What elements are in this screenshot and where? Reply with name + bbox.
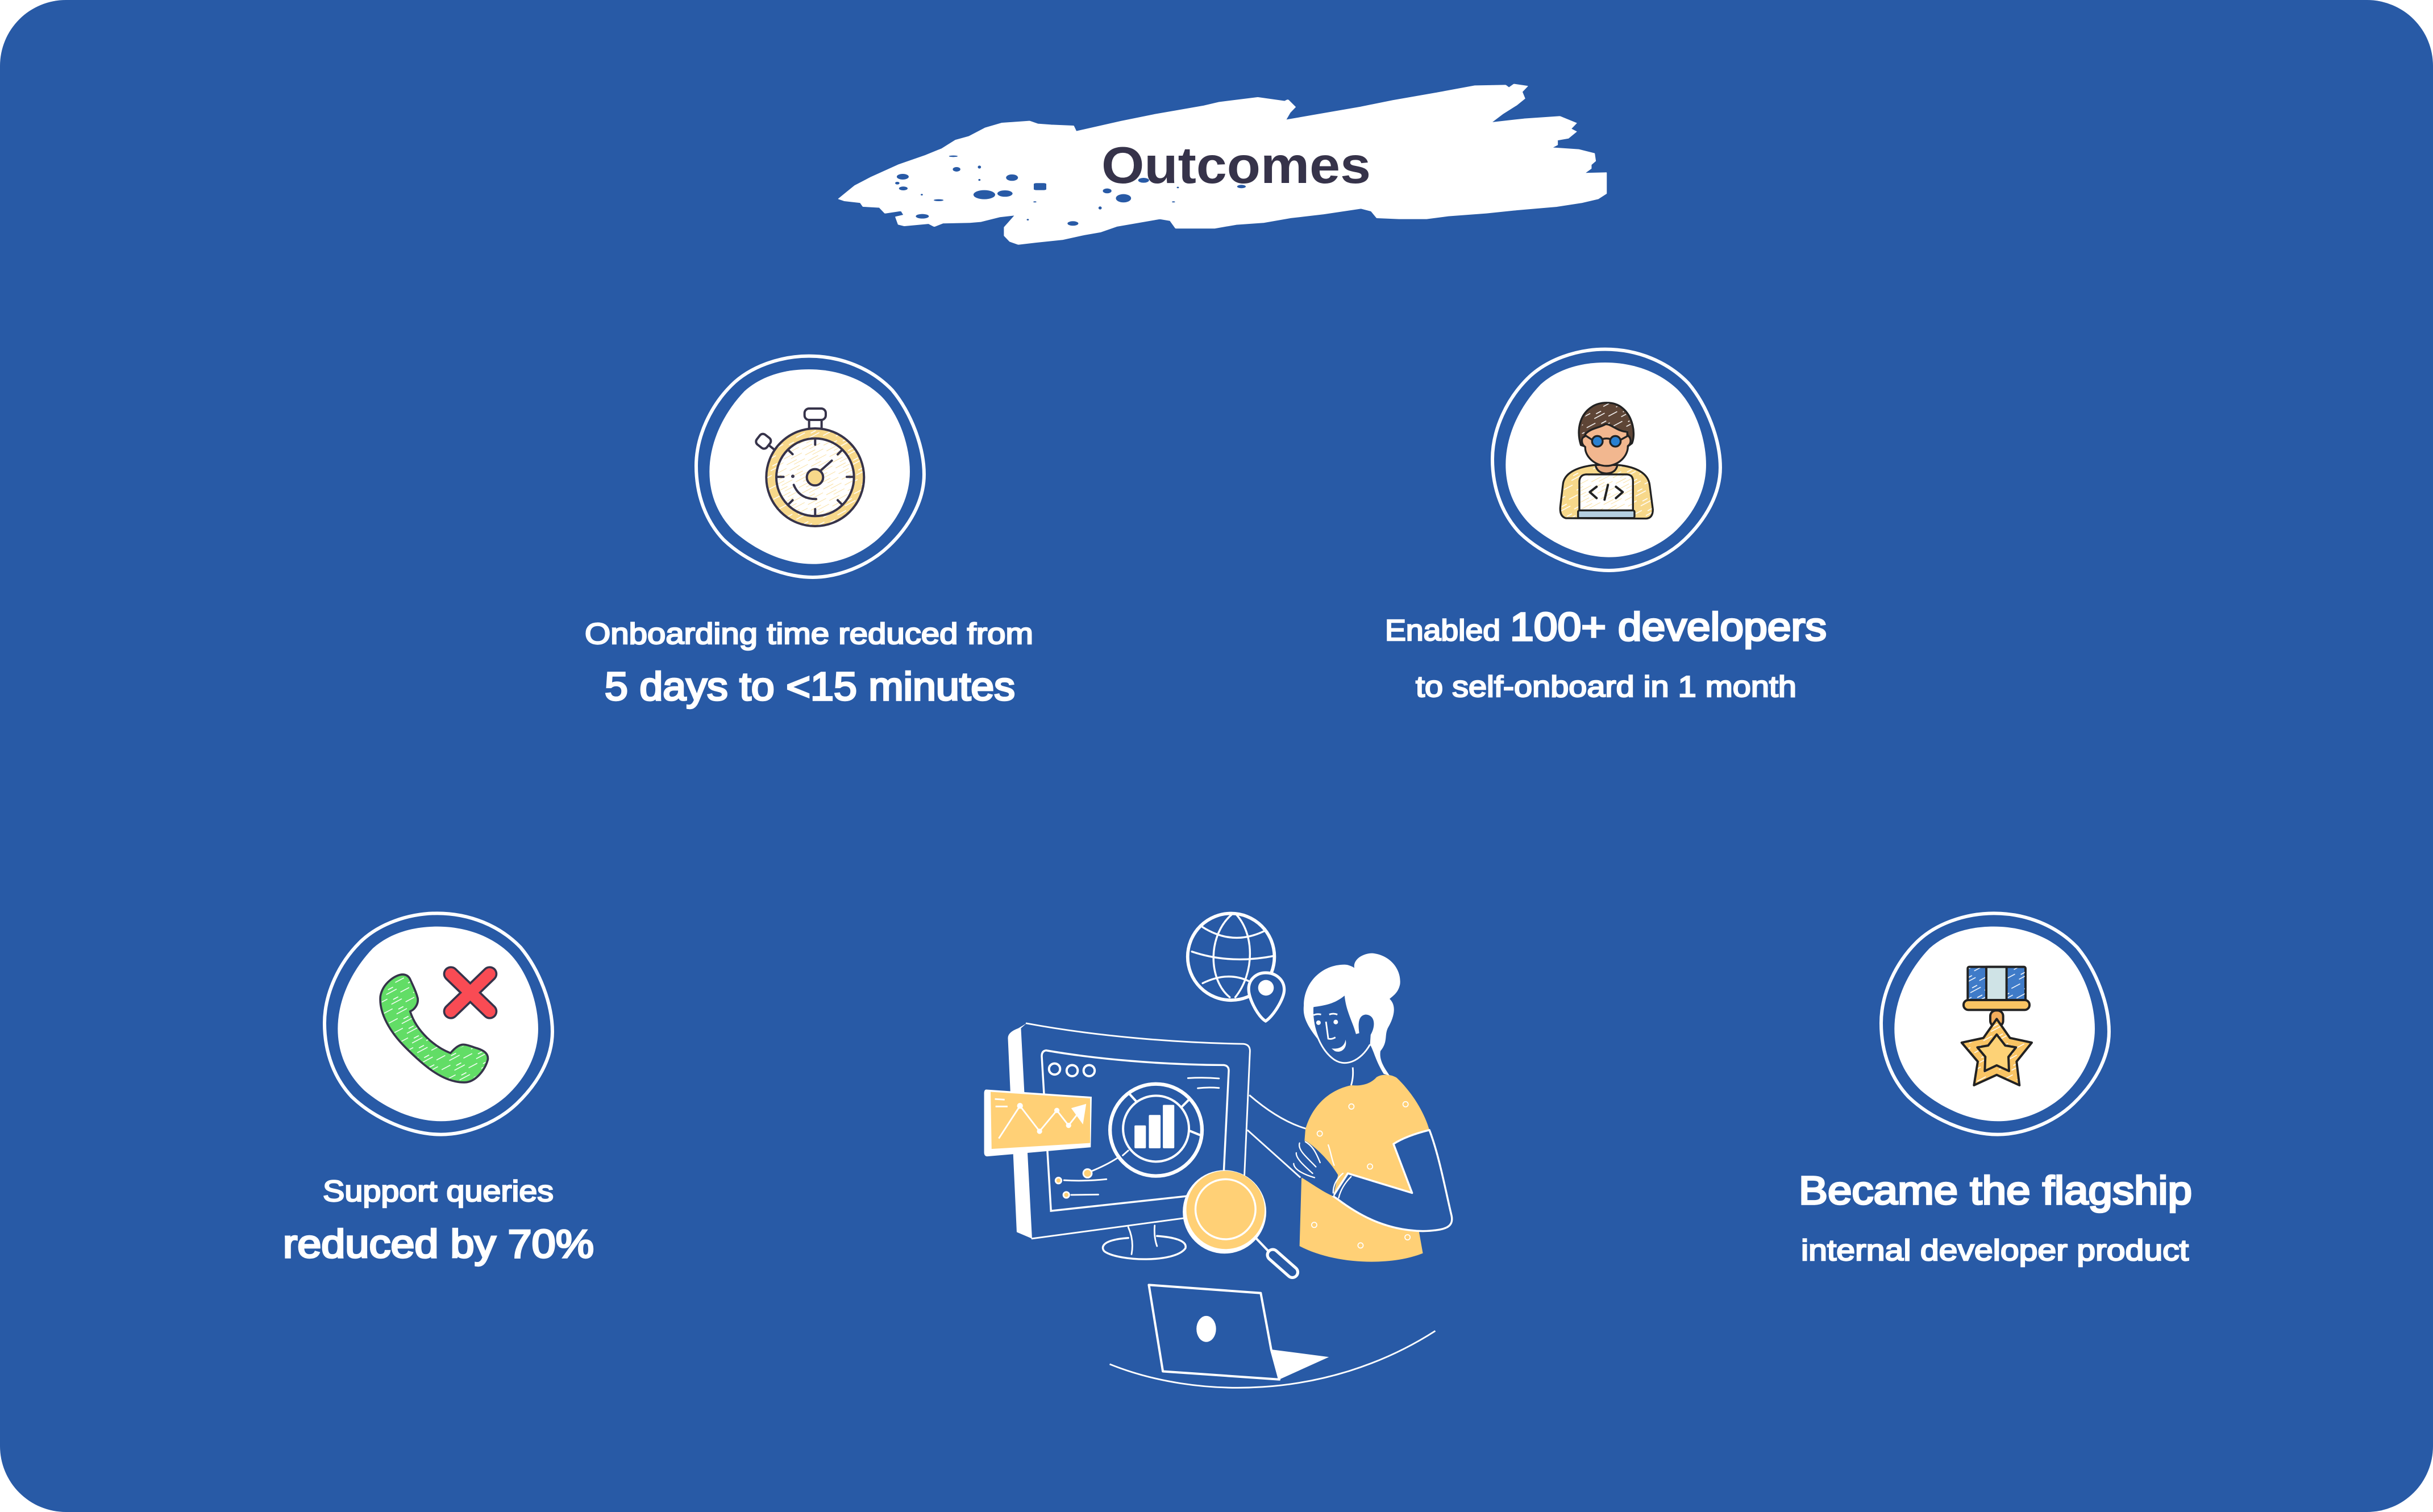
icon: developer with laptop in white blob: [1492, 349, 1720, 570]
text: onboarding label: Onboarding time reduced from: [585, 618, 1033, 651]
text: flagship figure: Became the flagship: [1799, 1168, 2192, 1213]
panel: flagship product outcome: [1799, 913, 2192, 1267]
panel: support queries outcome: [283, 913, 594, 1266]
text: self-onboard label: to self-onboard in 1 month: [1416, 670, 1796, 703]
icon: stopwatch in white blob: [696, 356, 924, 577]
title text: Outcomes: [1101, 137, 1371, 194]
heading: brush stroke with Outcomes title: [839, 84, 1606, 244]
text: support figure: reduced by 70%: [283, 1222, 594, 1266]
text: developers figure: 100+ developers: [1510, 605, 1827, 649]
icon: phone and cross in white blob: [325, 913, 552, 1135]
computer monitor with dashboard: [1008, 1023, 1250, 1259]
laptop on desk: [1110, 1285, 1435, 1388]
text: onboarding figure: 5 days to <15 minutes: [605, 664, 1015, 709]
icon: medal in white blob: [1881, 913, 2109, 1135]
text: enabled label: Enabled: [1385, 614, 1500, 647]
panel: developers self-onboarded outcome: [1385, 349, 1827, 703]
white brush stroke: [839, 84, 1606, 244]
woman figure: [1247, 953, 1452, 1262]
text: support label: Support queries: [323, 1175, 554, 1208]
magnifying glass: [1183, 1170, 1292, 1272]
text: flagship label: internal developer product: [1801, 1234, 2189, 1267]
panel: onboarding time outcome: [585, 356, 1033, 709]
illustration: woman analysing dashboard: [984, 914, 1452, 1388]
globe with location pin: [1188, 914, 1284, 1021]
yellow line chart card: [984, 1090, 1092, 1156]
